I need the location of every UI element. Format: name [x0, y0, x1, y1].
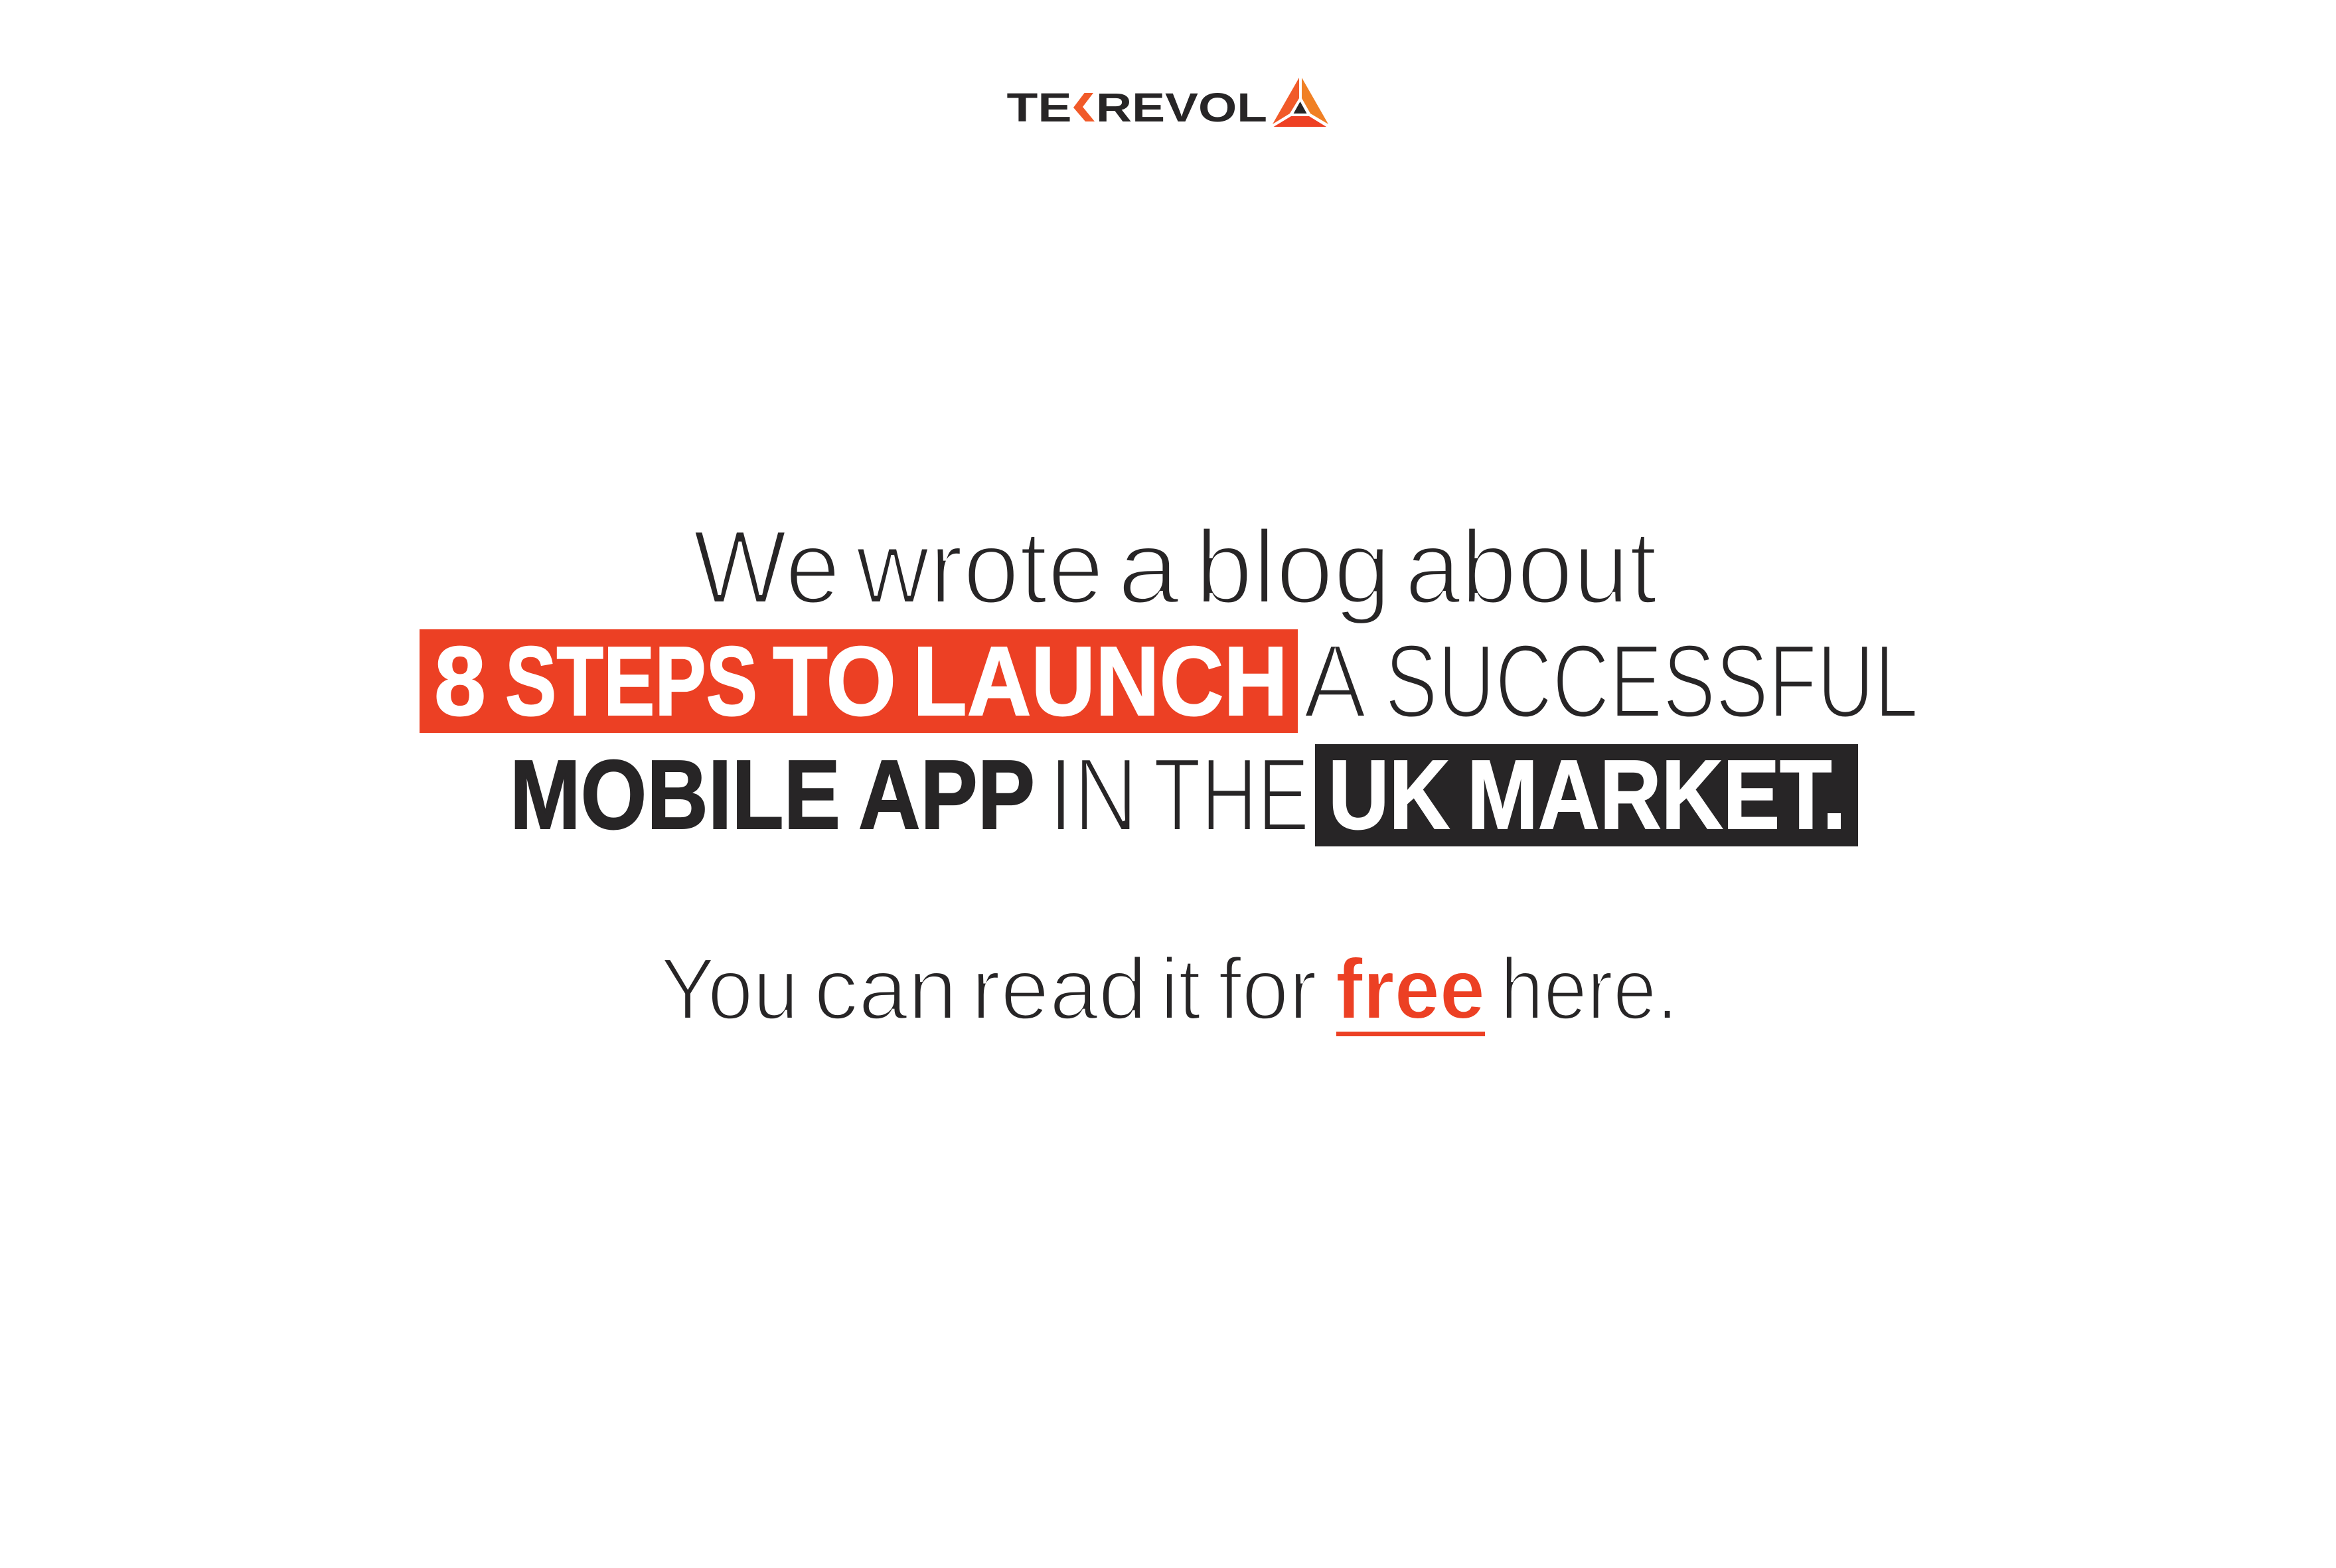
highlighted text: UK — [1328, 740, 1450, 850]
call to action line — [661, 940, 1678, 1038]
headline line 1 — [693, 509, 1657, 625]
light text: A — [1304, 623, 1367, 740]
text: you can read it for — [661, 940, 1317, 1038]
logo wordmark: TE — [1006, 85, 1071, 130]
headline line 1: wrote — [856, 509, 1104, 625]
logo: TekRevol — [1006, 78, 1328, 130]
text: you can read it for: for — [1218, 940, 1317, 1038]
highlighted text: 8 — [434, 627, 486, 736]
headline line 1: about — [1405, 509, 1657, 625]
light text: THE — [1154, 737, 1309, 854]
highlighted text — [434, 627, 1288, 736]
red highlight box — [420, 629, 1298, 733]
bold text: APP — [858, 740, 1035, 850]
light text: IN — [1049, 737, 1138, 854]
text: you can read it for: read — [971, 940, 1147, 1038]
highlighted text: STEPS — [505, 627, 757, 736]
text: here: here. — [1500, 940, 1678, 1038]
underline — [1336, 1032, 1485, 1036]
text: free: free — [1336, 942, 1485, 1037]
light text: SUCCESSFUL — [1385, 623, 1918, 740]
logo wordmark — [1006, 85, 1267, 130]
highlighted text: LAUNCH — [913, 627, 1288, 736]
logo triangle mark — [1273, 78, 1328, 127]
text: you can read it for: can — [814, 940, 957, 1038]
headline line 2 — [420, 623, 1918, 740]
highlighted text: TO — [773, 627, 896, 736]
bold text: MOBILE — [510, 740, 840, 850]
headline line 1: a — [1117, 509, 1180, 625]
light text — [1049, 737, 1309, 854]
highlighted text: MARKET. — [1467, 740, 1846, 850]
text: you can read it for: it — [1160, 940, 1201, 1038]
headline line 1: blog — [1195, 509, 1391, 625]
text: you can read it for: You — [661, 940, 799, 1038]
headline line 1: We — [693, 509, 840, 625]
logo wordmark: REVOL — [1096, 85, 1267, 130]
headline line 3 — [510, 737, 1858, 854]
highlighted text — [1328, 740, 1846, 850]
dark highlight box — [1315, 744, 1858, 846]
light text — [1304, 623, 1918, 740]
